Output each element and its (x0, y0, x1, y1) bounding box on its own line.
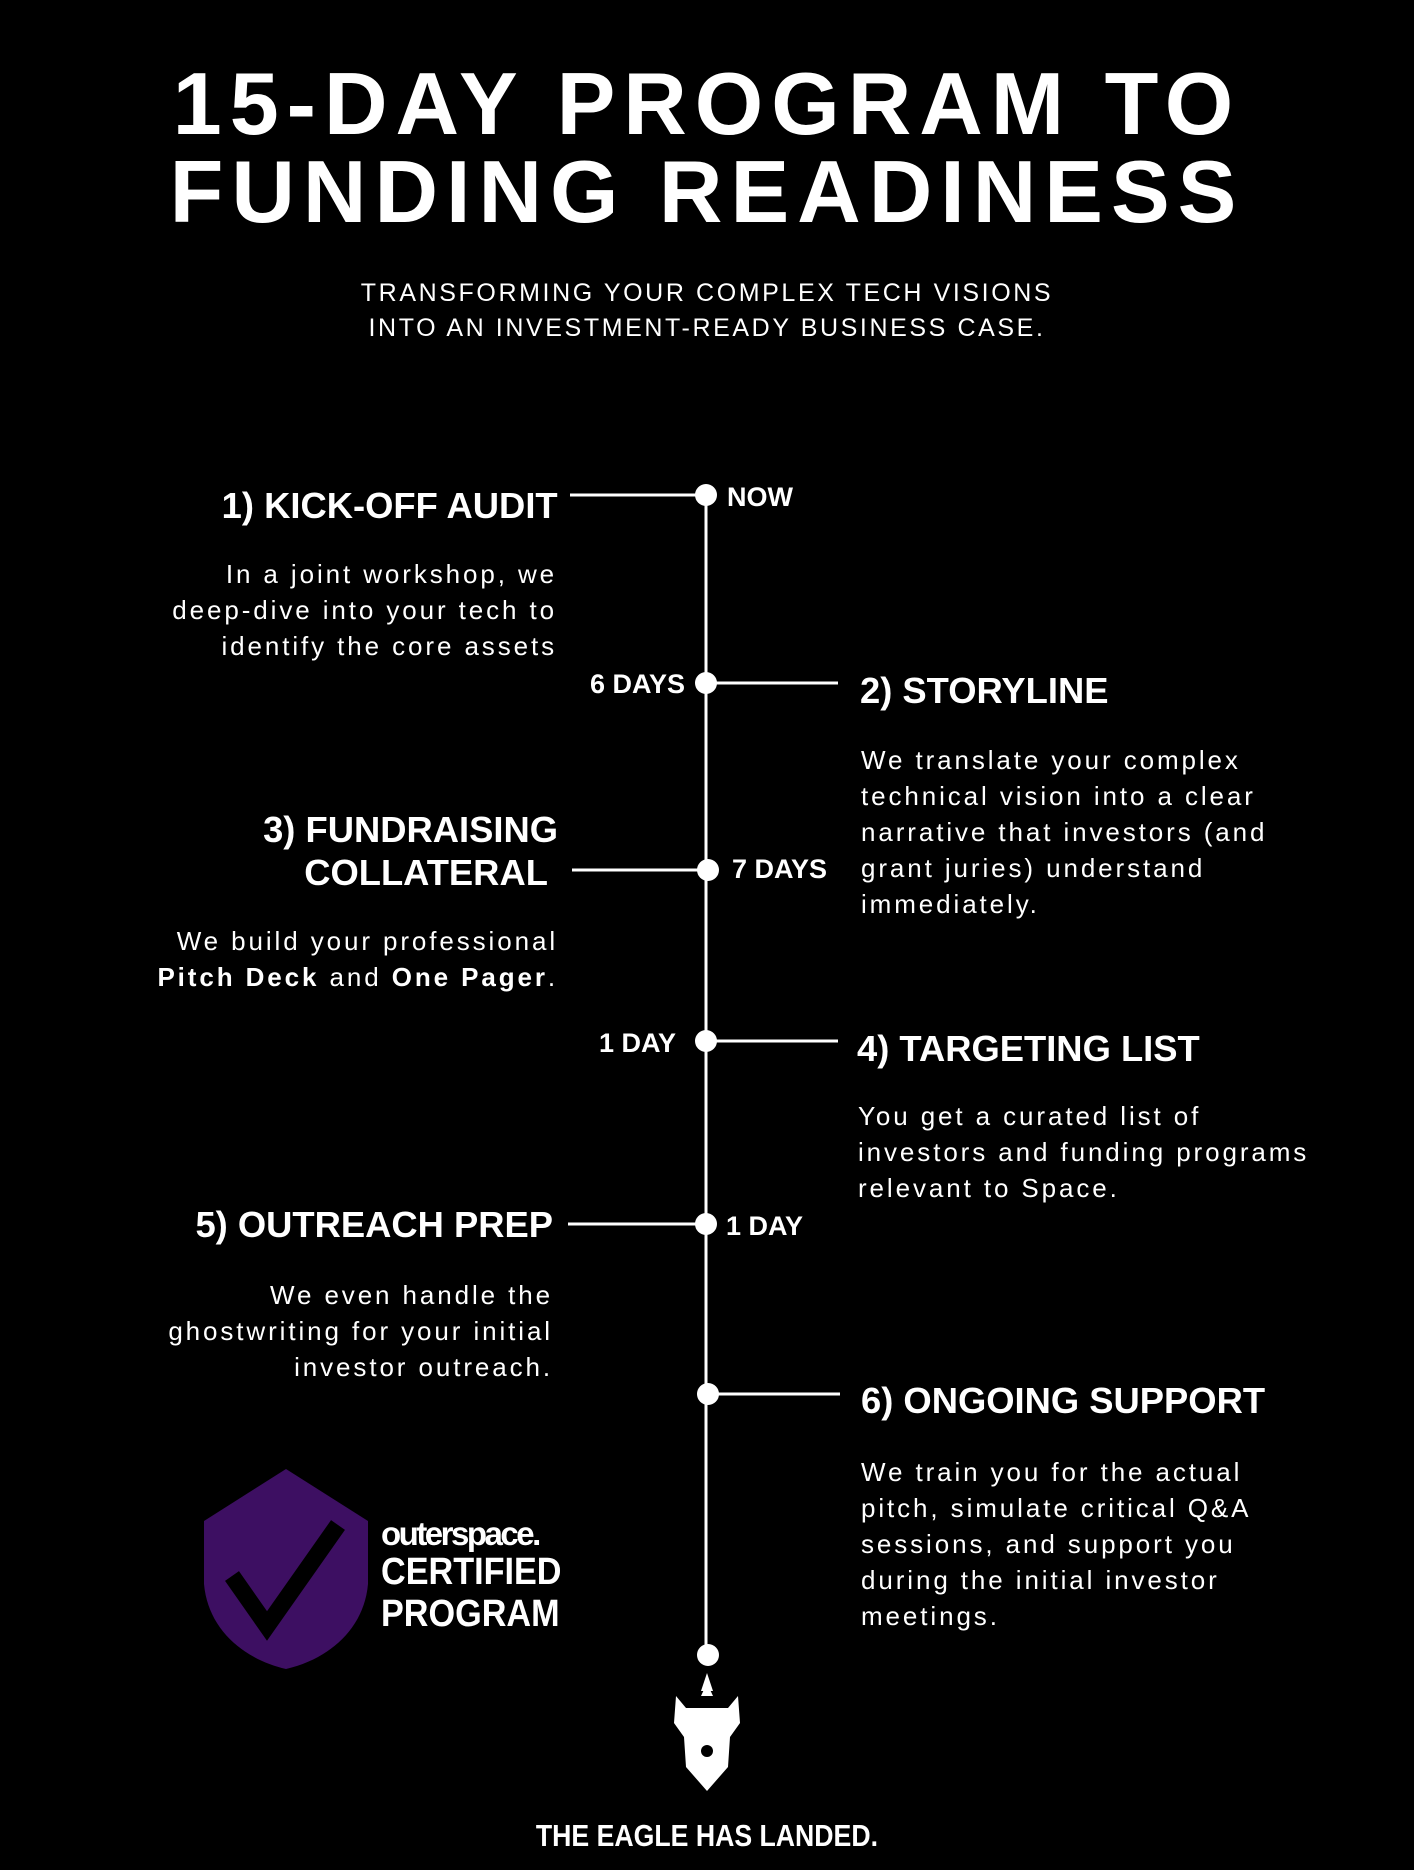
step 2 body: immediately. (861, 889, 1040, 919)
step 2 body: grant juries) understand (861, 853, 1205, 883)
step 6 body: pitch, simulate critical Q&A (861, 1493, 1251, 1523)
step 5 body: ghostwriting for your initial (168, 1316, 553, 1346)
step 4 body: relevant to Space. (858, 1173, 1120, 1203)
icon: shield (204, 1469, 368, 1669)
label: now: NOW (727, 482, 793, 512)
certified badge text (381, 1515, 562, 1635)
subtitle: TRANSFORMING YOUR COMPLEX TECH VISIONS (361, 279, 1053, 307)
step 2 heading: 2) STORYLINE (860, 670, 1109, 711)
subtitle: INTO AN INVESTMENT-READY BUSINESS CASE. (368, 314, 1046, 342)
step 5 body: We even handle the (270, 1280, 553, 1310)
step 3 heading: 3) FUNDRAISING (263, 809, 558, 850)
step 4 heading: 4) TARGETING LIST (857, 1028, 1200, 1069)
step 6 heading: 6) ONGOING SUPPORT (861, 1380, 1265, 1421)
step 4 body (858, 1101, 1309, 1203)
step 3 body: Pitch Deck and One Pager. (157, 962, 558, 992)
step 2 body: We translate your complex (861, 745, 1241, 775)
subtitle (361, 279, 1053, 342)
certified badge text: outerspace. (381, 1515, 539, 1552)
step 3 heading (263, 809, 558, 893)
title: 15-DAY PROGRAM TO (173, 54, 1241, 153)
step 2 body (861, 745, 1267, 919)
step 4 body: investors and funding programs (858, 1137, 1309, 1167)
icon: rocket (674, 1673, 740, 1791)
step 5 body: investor outreach. (294, 1352, 553, 1382)
step 6 body: during the initial investor (861, 1565, 1220, 1595)
step 4 body: You get a curated list of (858, 1101, 1201, 1131)
step 3 body (157, 926, 558, 992)
step 6 body: meetings. (861, 1601, 1000, 1631)
step 6 body (861, 1457, 1251, 1631)
step 2 body: narrative that investors (and (861, 817, 1267, 847)
step 3 heading: COLLATERAL (304, 852, 548, 893)
certified badge text: PROGRAM (381, 1593, 560, 1635)
step 3 body: We build your professional (177, 926, 558, 956)
title: FUNDING READINESS (170, 142, 1244, 241)
step 5 heading: 5) OUTREACH PREP (195, 1204, 553, 1245)
step 1 heading: 1) KICK-OFF AUDIT (222, 485, 558, 526)
step 1 body: In a joint workshop, we (226, 559, 557, 589)
label: 1 day: 1 DAY (726, 1211, 803, 1241)
step 1 body: identify the core assets (221, 631, 557, 661)
step 5 body (168, 1280, 553, 1382)
step 6 body: We train you for the actual (861, 1457, 1242, 1487)
step 2 body: technical vision into a clear (861, 781, 1256, 811)
step 6 body: sessions, and support you (861, 1529, 1236, 1559)
step 1 body: deep-dive into your tech to (172, 595, 557, 625)
title (170, 54, 1244, 241)
certified badge text: CERTIFIED (381, 1551, 562, 1593)
label: 1 day: 1 DAY (599, 1028, 676, 1058)
label: 7 days: 7 DAYS (732, 854, 827, 884)
footer tagline: THE EAGLE HAS LANDED. (536, 1818, 878, 1853)
step 1 body (172, 559, 557, 661)
label: 6 days: 6 DAYS (590, 669, 685, 699)
